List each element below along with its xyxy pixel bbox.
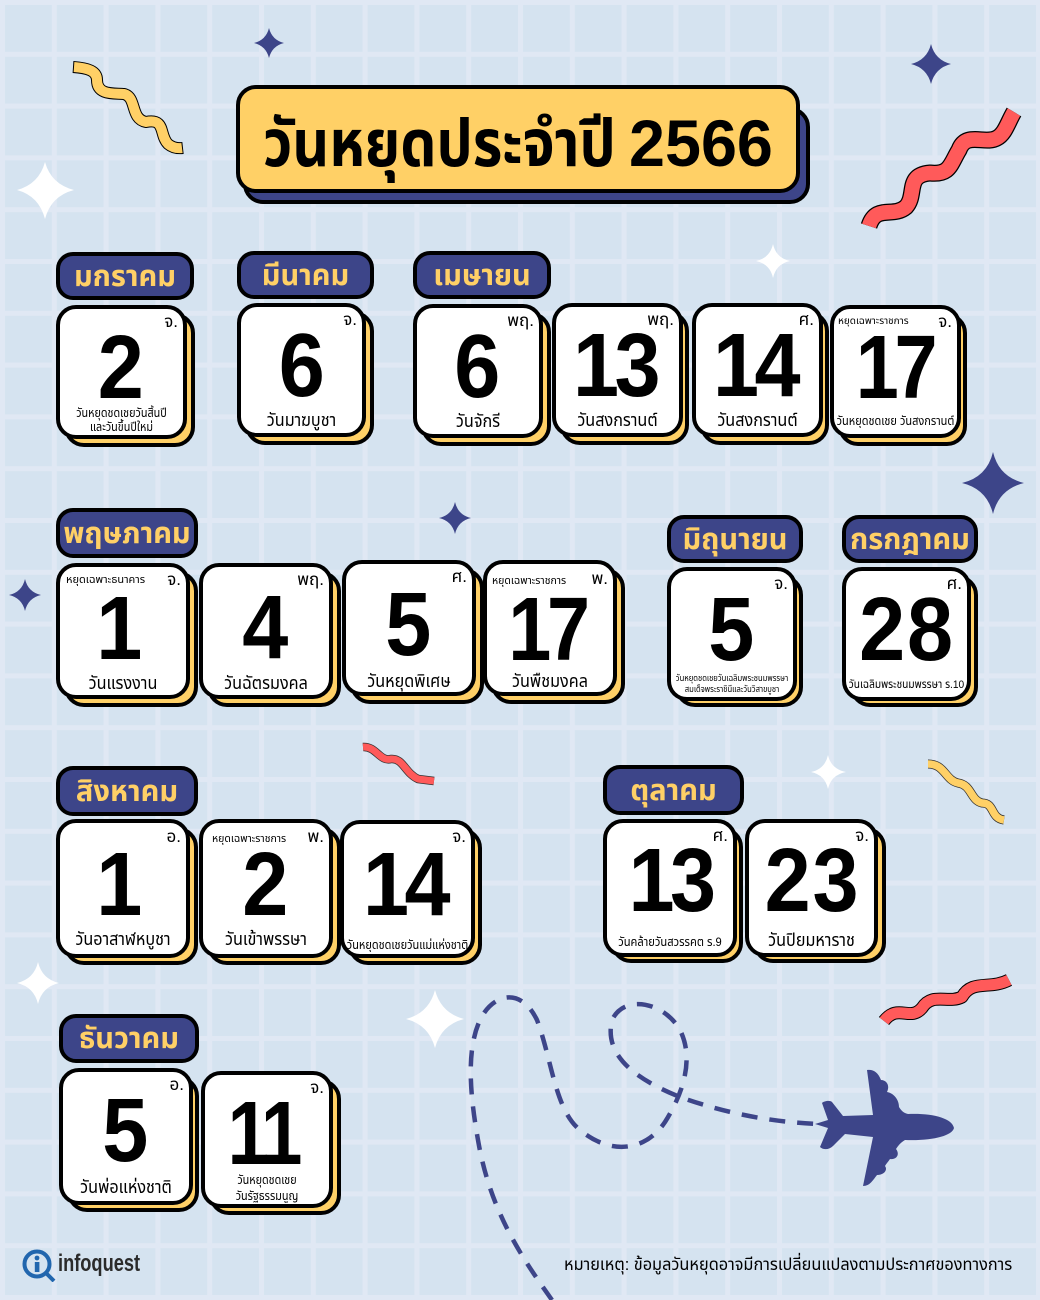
month: กรกฎาคม — [842, 515, 978, 563]
month: ธันวาคม: ธันวาคม — [79, 1023, 179, 1055]
date card: 28 ก.ค.: ศ. — [947, 574, 962, 593]
date card: 5 ธ.ค.: 5 — [102, 1081, 144, 1181]
date card: 1 ส.ค.: 1 — [96, 835, 138, 935]
date card: 17 เม.ย.: หยุดเฉพาะราชการ — [838, 316, 909, 327]
date card: 14 เม.ย.: 14 — [713, 316, 796, 416]
date card: 28 ก.ค. — [842, 567, 978, 707]
month: มกราคม — [56, 252, 194, 300]
flight path dashed — [471, 997, 818, 1300]
date card: 11 ธ.ค.: 11 — [228, 1084, 298, 1184]
date card: 14 ส.ค.: จ. — [452, 827, 466, 846]
month: สิงหาคม: สิงหาคม — [76, 776, 178, 808]
date card: 4 พ.ค.: พฤ. — [297, 570, 324, 589]
icon: airplane — [815, 1070, 954, 1186]
date card: 2 ม.ค.: วันหยุดชดเชยวันสิ้นปี — [76, 406, 167, 420]
date card: 14 เม.ย.: วันสงกรานต์ — [717, 410, 798, 430]
date card: 2 ส.ค.: วันเข้าพรรษา — [225, 929, 307, 949]
star: white lower left — [17, 962, 59, 1004]
date card: 6 เม.ย.: พฤ. — [507, 311, 534, 330]
title banner — [236, 85, 810, 204]
date card: 5 ธ.ค.: อ. — [170, 1075, 184, 1094]
date card: 4 พ.ค. — [199, 563, 341, 707]
month: สิงหาคม — [56, 766, 198, 816]
date card: 11 ธ.ค.: วันหยุดชดเชย — [237, 1173, 297, 1187]
date card: 14 ส.ค.: วันหยุดชดเชยวันแม่แห่งชาติ — [347, 938, 468, 952]
date card: 6 เม.ย. — [413, 304, 551, 446]
date card: 2 ม.ค.: และวันขึ้นปีใหม่ — [90, 420, 153, 434]
date card: 6 มี.ค. — [237, 303, 374, 445]
date card: 23 ต.ค.: 23 — [765, 831, 860, 931]
date card: 14 ส.ค. — [340, 820, 482, 965]
date card: 11 ธ.ค.: วันรัฐธรรมนูญ — [236, 1189, 298, 1203]
date card: 17 เม.ย.: จ. — [938, 312, 952, 331]
date card: 5 พ.ค. — [342, 560, 484, 704]
date card: 13 เม.ย.: วันสงกรานต์ — [577, 410, 658, 430]
date card: 5 ธ.ค. — [59, 1068, 199, 1212]
star: white left — [17, 162, 74, 219]
date card: 23 ต.ค. — [745, 819, 886, 963]
month: กรกฎาคม: กรกฎาคม — [850, 524, 970, 556]
date card: 4 พ.ค.: 4 — [242, 578, 284, 678]
date card: 17 พ.ค.: 17 — [508, 580, 586, 680]
date card: 1 พ.ค.: จ. — [167, 570, 181, 589]
date card: 5 มิ.ย.: 5 — [708, 580, 750, 680]
star: navy top — [254, 28, 284, 58]
date card: 17 พ.ค.: หยุดเฉพาะราชการ — [492, 575, 566, 587]
star: white centre — [406, 990, 464, 1048]
date card: 17 เม.ย.: วันหยุดชดเชย วันสงกรานต์ — [837, 414, 954, 428]
star: navy large right — [962, 452, 1024, 514]
date card: 5 ธ.ค.: วันพ่อแห่งชาติ — [80, 1177, 172, 1197]
date card: 5 พ.ค.: วันหยุดพิเศษ — [367, 671, 451, 691]
date card: 17 พ.ค.: วันพืชมงคล — [512, 671, 588, 691]
month: เมษายน — [413, 251, 551, 299]
date card: 17 พ.ค. — [483, 560, 625, 704]
date card: 13 ต.ค. — [603, 819, 743, 963]
date card: 6 เม.ย.: 6 — [454, 317, 496, 417]
date card: 17 เม.ย. — [830, 305, 967, 446]
date card: 13 ต.ค.: 13 — [629, 831, 711, 931]
month: มกราคม: มกราคม — [74, 261, 176, 293]
month: พฤษภาคม: พฤษภาคม — [63, 518, 191, 550]
date card: 1 พ.ค.: วันแรงงาน — [89, 673, 157, 693]
date card: 11 ธ.ค. — [201, 1071, 341, 1215]
star: navy left — [9, 579, 41, 611]
month: มิถุนายน: มิถุนายน — [682, 524, 787, 556]
star: navy top right — [911, 44, 951, 84]
month: ตุลาคม: ตุลาคม — [630, 775, 717, 807]
date card: 2 ส.ค.: หยุดเฉพาะราชการ — [212, 833, 286, 845]
month: เมษายน: เมษายน — [433, 260, 531, 292]
date card: 1 พ.ค. — [56, 563, 198, 707]
date card: 28 ก.ค.: วันเฉลิมพระชนมพรรษา ร.10 — [849, 679, 964, 691]
date card: 2 ส.ค.: 2 — [242, 835, 284, 935]
date card: 1 พ.ค.: 1 — [96, 579, 138, 679]
date card: 5 มิ.ย.: สมเด็จพระราชินีและวันวิสาขบูชา — [685, 684, 779, 694]
date card: 2 ม.ค.: 2 — [98, 318, 139, 418]
star: navy middle — [439, 502, 471, 534]
date card: 1 พ.ค.: หยุดเฉพาะธนาคาร — [66, 574, 145, 586]
date card: 13 ต.ค.: ศ. — [713, 826, 728, 845]
date card: 5 มิ.ย.: จ. — [774, 574, 788, 593]
date card: 13 เม.ย.: พฤ. — [647, 310, 674, 329]
date card: 5 พ.ค.: ศ. — [452, 567, 467, 586]
date card: 6 มี.ค.: วันมาฆบูชา — [267, 410, 336, 430]
date card: 2 ม.ค.: จ. — [164, 312, 178, 331]
date card: 4 พ.ค.: วันฉัตรมงคล — [224, 673, 308, 693]
date card: 13 ต.ค.: วันคล้ายวันสวรรคต ร.9 — [618, 935, 722, 949]
logo: infoquest: infoquest — [58, 1250, 140, 1277]
date card: 2 ส.ค. — [199, 819, 341, 965]
date card: 11 ธ.ค.: จ. — [310, 1078, 324, 1097]
footnote: หมายเหตุ: ข้อมูลวันหยุดอาจมีการเปลี่ยนแปลงตามประกาศของทางการ — [564, 1255, 1012, 1274]
date card: 17 เม.ย.: 17 — [856, 318, 933, 418]
star: white October — [811, 755, 846, 789]
date card: 1 ส.ค. — [56, 819, 198, 965]
date card: 6 เม.ย.: วันจักรี — [456, 411, 500, 431]
squiggle: yellow top left — [73, 67, 183, 148]
date card: 14 เม.ย. — [692, 303, 829, 445]
date card: 14 ส.ค.: 14 — [363, 835, 446, 935]
month: มีนาคม — [237, 251, 374, 299]
squiggle: red small — [363, 747, 434, 781]
squiggle: yellow right — [928, 764, 1004, 820]
month: มีนาคม: มีนาคม — [262, 260, 349, 292]
date card: 23 ต.ค.: จ. — [855, 826, 869, 845]
date card: 13 เม.ย.: 13 — [573, 316, 656, 416]
date card: 1 ส.ค.: อ. — [167, 827, 181, 846]
date card: 5 มิ.ย. — [667, 567, 803, 707]
date card: 28 ก.ค.: 28 — [859, 580, 955, 680]
squiggle: red top right — [869, 112, 1014, 226]
date card: 2 ส.ค.: พ. — [307, 827, 324, 846]
month: ธันวาคม — [59, 1014, 199, 1063]
title banner: วันหยุดประจำปี — [263, 106, 616, 180]
logo: infoquest — [22, 1250, 140, 1282]
month: ตุลาคม — [603, 765, 744, 815]
date card: 2 ม.ค. — [56, 305, 195, 447]
title banner: 2566 — [629, 106, 773, 180]
star: white top right — [756, 244, 790, 278]
date card: 5 พ.ค.: 5 — [385, 575, 427, 675]
date card: 5 มิ.ย.: วันหยุดชดเชยวันเฉลิมพระชนมพรรษา — [676, 673, 788, 683]
date card: 23 ต.ค.: วันปิยมหาราช — [768, 930, 855, 950]
date card: 14 เม.ย.: ศ. — [799, 310, 814, 329]
month: มิถุนายน — [667, 515, 803, 563]
date card: 17 พ.ค.: พ. — [591, 569, 608, 588]
date card: 6 มี.ค.: 6 — [279, 316, 320, 416]
date card: 13 เม.ย. — [552, 303, 689, 445]
squiggle: red lower right — [884, 980, 1009, 1021]
month: พฤษภาคม — [56, 508, 198, 558]
date card: 1 ส.ค.: วันอาสาฬหบูชา — [75, 929, 171, 949]
date card: 6 มี.ค.: จ. — [343, 310, 357, 329]
